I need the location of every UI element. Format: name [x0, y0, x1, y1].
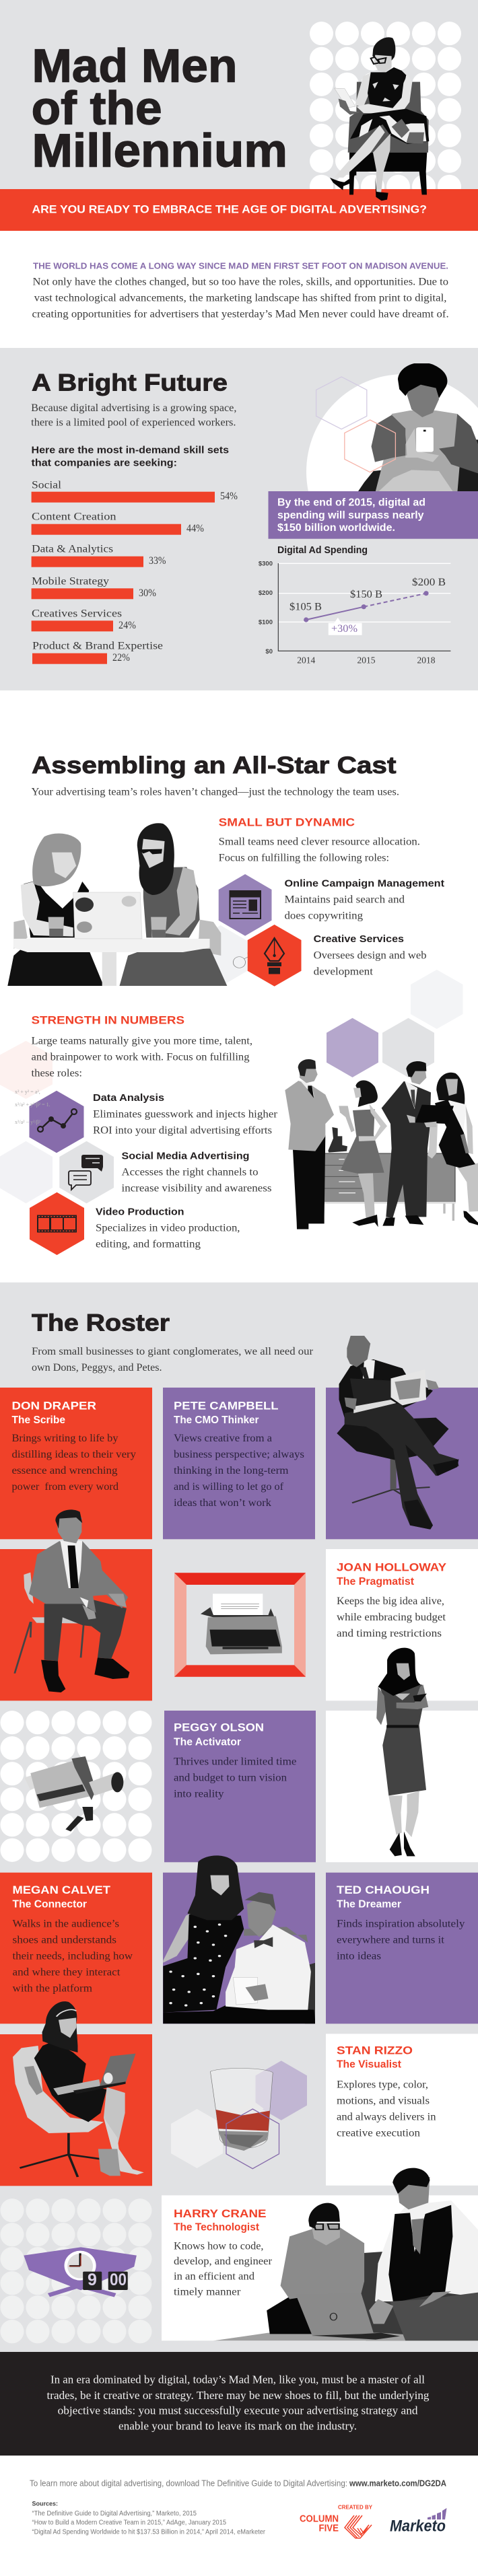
- icon: movie camera: [24, 1756, 123, 1832]
- card: megan calvet: The Connector: [12, 1898, 87, 1910]
- intro copy: there is a limited pool of experienced workers.: [31, 417, 236, 428]
- card: stan rizzo: [326, 2034, 478, 2186]
- card: pete campbell: Views creative from a: [174, 1433, 272, 1444]
- card: megan calvet: MEGAN CALVET: [12, 1884, 111, 1896]
- panel: assembling an all-star cast: [0, 752, 478, 1255]
- bar chart: skill sets: 22%: [112, 652, 130, 664]
- icon: whiskey glass with hexagons: [171, 2061, 307, 2169]
- card: megan photo background: [0, 2034, 152, 2186]
- subsection: small but dynamic: [219, 816, 420, 864]
- closing statement band: objective stands: you must successfully execute your advertising strategy and: [58, 2404, 418, 2417]
- line chart: digital ad spending: 2014: [297, 655, 315, 666]
- line chart: digital ad spending: $0: [265, 648, 273, 655]
- card: peggy olson: PEGGY OLSON: [174, 1721, 264, 1734]
- sources: Sources:: [32, 2501, 58, 2508]
- card: megan calvet: shoes and understands: [12, 1935, 116, 1946]
- card: megan calvet: [0, 1873, 152, 2024]
- role: data analysis: [93, 1092, 278, 1136]
- subsection: strength in numbers: Large teams naturally give you more time, talent,: [31, 1036, 252, 1047]
- text block: intro: vast technological advancements, the marketing landscape has shifted from print to digital,: [34, 292, 446, 303]
- card: stan rizzo: motions, and visuals: [337, 2095, 430, 2106]
- line chart: digital ad spending: 2015: [357, 655, 376, 666]
- flip digits: 00: [110, 2270, 127, 2289]
- card: megan calvet: their needs, including how: [12, 1951, 133, 1962]
- text block: intro: THE WORLD HAS COME A LONG WAY SINCE MAD MEN FIRST SET FOOT ON MADISON AVENUE.: [33, 261, 448, 271]
- line chart: digital ad spending: $300: [259, 561, 273, 568]
- line chart: digital ad spending: 2018: [417, 655, 436, 666]
- role: online campaign management: Maintains paid search and: [284, 894, 405, 906]
- role: social media advertising: increase visibility and awareness: [121, 1183, 272, 1194]
- text block: intro: creating opportunities for advertisers that yesterday’s Mad Men never could have dreamt of.: [32, 308, 449, 320]
- card: pete campbell: PETE CAMPBELL: [174, 1400, 279, 1412]
- bar chart: skill sets: 54%: [220, 491, 238, 502]
- card: don draper: distilling ideas to their very: [12, 1449, 136, 1460]
- card: don draper: The Scribe: [12, 1415, 65, 1426]
- photo: two men at laptop: [213, 2168, 478, 2342]
- logo: column five: COLUMN: [300, 2513, 339, 2524]
- panel: a bright future: [31, 363, 478, 666]
- icon: video production film strip: [30, 1192, 84, 1255]
- line chart: digital ad spending: $100: [259, 618, 273, 626]
- subsection: small but dynamic: Focus on fulfilling the following roles:: [219, 853, 389, 864]
- photo: woman with smartphone: [306, 363, 478, 491]
- line chart: digital ad spending: $200: [259, 589, 273, 597]
- role: creative services: development: [314, 966, 374, 977]
- card: stan rizzo: and always delivers in: [337, 2111, 436, 2122]
- card: pete photo: [326, 1388, 478, 1539]
- role: online campaign management: does copywriting: [284, 910, 363, 922]
- bar chart: skill sets: Data & Analytics: [32, 544, 113, 555]
- panel: the roster: [0, 1310, 478, 2343]
- intro copy: [31, 402, 236, 428]
- sources: [32, 2501, 266, 2536]
- photo: man reading magazine: [337, 1336, 458, 1530]
- title: of the: [32, 81, 162, 134]
- role: video production: [96, 1206, 240, 1250]
- sources: “Digital Ad Spending Worldwide to hit $137.53 Billion in 2014,” April 2014, eMarketer: [32, 2529, 266, 2536]
- callout: ad spending: [268, 491, 478, 539]
- photo: group of four colleagues: [285, 1059, 478, 1229]
- card: megan calvet: and where they interact: [12, 1967, 121, 1978]
- card: harry crane: [162, 2195, 478, 2340]
- card: don draper: DON DRAPER: [12, 1400, 96, 1412]
- card: pete campbell: thinking in the long-term: [174, 1465, 288, 1476]
- role: video production: editing, and formatting: [96, 1239, 201, 1250]
- callout: ad spending: By the end of 2015, digital ad: [277, 497, 425, 508]
- logo: column five: FIVE: [319, 2524, 339, 2534]
- line chart: digital ad spending: $150 B: [350, 589, 382, 600]
- logo: column five: CREATED BY: [338, 2504, 373, 2510]
- flip digits: 9: [88, 2270, 97, 2289]
- intro copy: Because digital advertising is a growing space,: [31, 402, 236, 414]
- title: Mad Men: [32, 40, 237, 92]
- card: joan holloway: [326, 1549, 478, 1862]
- card: joan holloway: Keeps the big idea alive,: [337, 1596, 444, 1607]
- callout: ad spending: spending will surpass nearly: [277, 509, 424, 521]
- photo: man seated on chair: [15, 1509, 129, 1692]
- card: typewriter frame: [174, 1573, 306, 1677]
- icon: alarm clock: [24, 2247, 137, 2295]
- line chart: digital ad spending: +30%: [331, 623, 357, 635]
- bar chart: skill sets: Creatives Services: [32, 608, 122, 620]
- icon: data analysis line chart: [30, 1091, 83, 1153]
- card: joan holloway: JOAN HOLLOWAY: [337, 1561, 447, 1574]
- photo: two women at laptop: [7, 823, 255, 986]
- role: video production: Specializes in video production,: [96, 1223, 240, 1234]
- footer call to action: www.marketo.com/DG2DA: [349, 2478, 446, 2488]
- card: harry crane: Knows how to code,: [174, 2240, 264, 2252]
- card: don draper: Brings writing to life by: [12, 1433, 118, 1444]
- card: megan calvet: Walks in the audience’s: [12, 1919, 119, 1930]
- icon: social media chat bubbles: [59, 1141, 114, 1203]
- bar chart: skill sets: 33%: [149, 555, 166, 567]
- card: harry crane: timely manner: [174, 2287, 241, 2298]
- subheading: Your advertising team’s roles haven’t changed—just the technology the team uses.: [31, 787, 399, 798]
- heading: The Roster: [32, 1310, 170, 1336]
- faint equations: x² + y² = a²,: [15, 1089, 40, 1095]
- red tagline band: [0, 189, 478, 231]
- intro copy: own Dons, Peggys, and Petes.: [32, 1362, 162, 1373]
- card: pete campbell: and is willing to let go of: [174, 1481, 284, 1493]
- title: Millennium: [32, 124, 287, 176]
- subsection: strength in numbers: these roles:: [31, 1068, 82, 1079]
- callout: ad spending: $150 billion worldwide.: [277, 522, 395, 534]
- role: online campaign management: [284, 878, 444, 922]
- closing statement band: In an era dominated by digital, today’s Mad Men, like you, must be a master of all: [50, 2373, 425, 2386]
- card: don draper: [0, 1388, 152, 1539]
- faint equations: x²/a² − y²/β²: [15, 1119, 41, 1125]
- card: stan rizzo: creative execution: [337, 2127, 420, 2139]
- heading: Assembling an All-Star Cast: [32, 752, 397, 779]
- sources: “The Definitive Guide to Digital Advertising,” Marketo, 2015: [32, 2510, 197, 2517]
- card: peggy olson: The Activator: [174, 1736, 241, 1748]
- card: ted chaough: [326, 1873, 478, 2024]
- card: stan rizzo: Explores type, color,: [337, 2079, 428, 2090]
- card: pete campbell: business perspective; always: [174, 1449, 304, 1460]
- subheading: skill sets: that companies are seeking:: [31, 457, 177, 468]
- role: social media advertising: [121, 1150, 272, 1194]
- card: peggy olson: Thrives under limited time: [174, 1756, 297, 1768]
- bar chart: skill sets: 24%: [118, 620, 136, 631]
- panel: hero: [0, 22, 478, 231]
- card: joan holloway: The Pragmatist: [337, 1576, 415, 1587]
- card: ted chaough: into ideas: [337, 1951, 381, 1962]
- closing statement band: enable your brand to leave its mark on the industry.: [118, 2420, 357, 2433]
- icon: online campaign newspaper: [219, 874, 272, 936]
- photo: woman seated with tablet: [330, 37, 429, 201]
- role: creative services: [314, 933, 427, 977]
- sources: “How to Build a Modern Creative Team in 2015,” AdAge, January 2015: [32, 2519, 226, 2527]
- heading: A Bright Future: [32, 370, 228, 396]
- faint equations: x²/a² + y²/β² = 1.: [15, 1102, 50, 1108]
- bar chart: skill sets: 44%: [186, 523, 204, 534]
- closing statement band: [0, 2352, 478, 2456]
- role: creative services: Creative Services: [314, 933, 404, 945]
- card: pete campbell: The CMO Thinker: [174, 1415, 259, 1426]
- logo: marketo: [390, 2508, 447, 2536]
- text block: intro: Not only have the clothes changed, but so too have the roles, skills, and opportunities. Due to: [32, 276, 448, 287]
- bar chart: skill sets: Product & Brand Expertise: [32, 641, 163, 652]
- role: video production: Video Production: [96, 1206, 184, 1217]
- line chart: digital ad spending: $105 B: [289, 602, 322, 613]
- subsection: strength in numbers: [31, 1014, 252, 1079]
- card: ted chaough: everywhere and turns it: [337, 1935, 445, 1946]
- faint hexagons: [194, 925, 463, 1029]
- subsection: strength in numbers: STRENGTH IN NUMBERS: [31, 1014, 184, 1027]
- decorative hexagons behind group: [0, 1018, 434, 1203]
- bar chart: skill sets: [32, 480, 238, 664]
- card: harry crane: develop, and engineer: [174, 2256, 273, 2267]
- flip digits: [88, 2270, 127, 2289]
- tagline text: ARE YOU READY TO EMBRACE THE AGE OF DIGITAL ADVERTISING?: [32, 204, 427, 216]
- logo: column five: [300, 2504, 373, 2538]
- subheading: skill sets: Here are the most in-demand skill sets: [31, 444, 229, 456]
- role: social media advertising: Accesses the right channels to: [121, 1167, 259, 1178]
- subheading: skill sets: [31, 444, 229, 468]
- icon: creative services pen nib: [248, 925, 302, 987]
- bar chart: skill sets: Mobile Strategy: [32, 575, 109, 587]
- role: creative services: Oversees design and web: [314, 950, 427, 961]
- logo: marketo: Marketo: [390, 2517, 446, 2536]
- line chart: digital ad spending: Digital Ad Spending: [277, 544, 368, 556]
- photo: couple with tablet: [163, 1855, 316, 2024]
- role: online campaign management: Online Campaign Management: [284, 878, 444, 889]
- card: ted chaough: The Dreamer: [337, 1899, 401, 1910]
- text block: intro: [32, 261, 449, 320]
- card: don draper: power from every word: [12, 1481, 118, 1493]
- card: harry crane: The Technologist: [174, 2221, 260, 2233]
- role: data analysis: Eliminates guesswork and injects higher: [93, 1108, 278, 1120]
- card: peggy olson: and budget to turn vision: [174, 1773, 287, 1784]
- photo: woman with phone: [376, 1648, 428, 1856]
- card: don draper: essence and wrenching: [12, 1465, 118, 1476]
- card: don photo: [0, 1549, 152, 1701]
- title: [32, 40, 287, 176]
- card: joan holloway: and timing restrictions: [337, 1628, 442, 1639]
- bar chart: skill sets: Content Creation: [32, 511, 116, 522]
- faint equations: [15, 1089, 50, 1125]
- role: data analysis: ROI into your digital advertising efforts: [93, 1124, 272, 1136]
- bar chart: skill sets: Social: [32, 480, 61, 491]
- card: harry crane: HARRY CRANE: [174, 2207, 267, 2220]
- card: ted chaough: TED CHAOUGH: [337, 1884, 430, 1896]
- dot pattern: [310, 22, 461, 199]
- subsection: small but dynamic: SMALL BUT DYNAMIC: [219, 816, 355, 828]
- card: pete campbell: [163, 1388, 315, 1539]
- card: megan calvet: with the platform: [12, 1983, 92, 1995]
- card: stan rizzo: The Visualist: [337, 2059, 402, 2071]
- intro copy: [32, 1346, 314, 1373]
- card: couple photo background: [163, 1873, 315, 2024]
- dot pattern: camera panel: [0, 1711, 152, 1862]
- dot pattern: clock panel: [0, 2198, 152, 2343]
- subsection: strength in numbers: and brainpower to work with. Focus on fulfilling: [31, 1052, 250, 1063]
- card: peggy olson: into reality: [174, 1789, 224, 1800]
- card: peggy olson: [164, 1711, 316, 1862]
- footer call to action: To learn more about digital advertising, download The Definitive Guide to Digital Advertising:: [30, 2478, 347, 2488]
- role: data analysis: Data Analysis: [93, 1092, 164, 1104]
- photo: woman with laptop in lounge chair: [13, 2001, 144, 2177]
- role: social media advertising: Social Media Advertising: [121, 1150, 249, 1161]
- subsection: small but dynamic: Small teams need clever resource allocation.: [219, 836, 420, 848]
- card: pete campbell: ideas that won’t work: [174, 1497, 271, 1509]
- intro copy: From small businesses to giant conglomerates, we all need our: [32, 1346, 314, 1357]
- card: ted chaough: Finds inspiration absolutely: [337, 1919, 465, 1930]
- card: stan rizzo: STAN RIZZO: [337, 2044, 413, 2057]
- card: harry crane: in an efficient and: [174, 2271, 254, 2283]
- closing statement band: trades, be it creative or strategy. There may be new shoes to fill, but the underlying: [47, 2389, 430, 2402]
- card: joan holloway: while embracing budget: [337, 1612, 446, 1623]
- bar chart: skill sets: 30%: [139, 587, 156, 599]
- icon: typewriter: [201, 1594, 282, 1654]
- line chart: digital ad spending: $200 B: [412, 577, 446, 588]
- line chart: digital ad spending: [259, 544, 450, 666]
